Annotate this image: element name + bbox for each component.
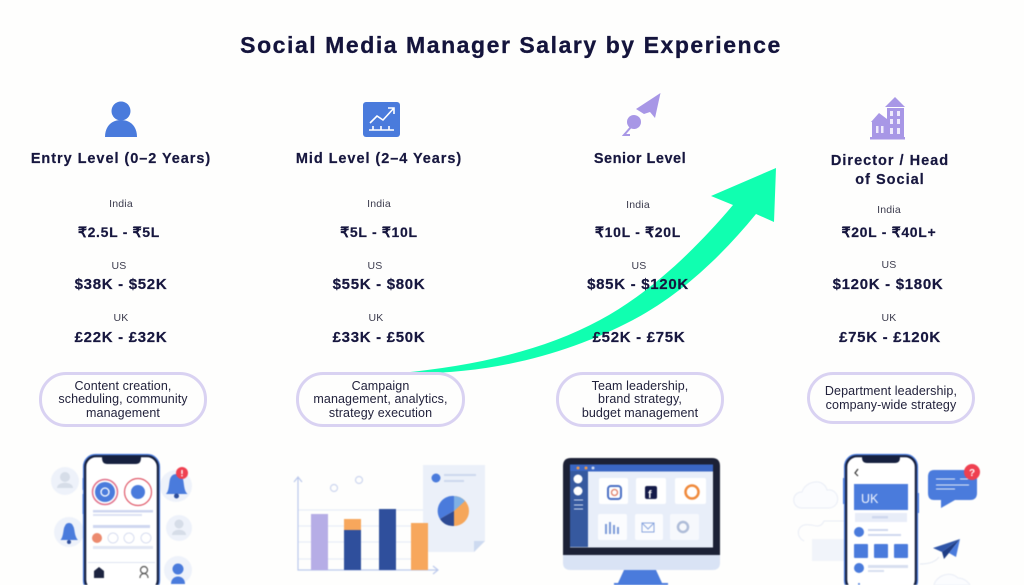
paper plane — [920, 539, 960, 564]
responsibilities — [556, 372, 724, 427]
UK range: £75K - £120K — [839, 329, 941, 346]
heading: director: Director / Head — [831, 153, 949, 169]
illustration: UK phone with chat — [793, 453, 981, 585]
India salary: India — [367, 198, 391, 210]
responsibilities — [296, 372, 465, 427]
US range: $38K - $52K — [75, 276, 167, 293]
heading: mid level: Mid Level (2–4 Years) — [296, 151, 462, 167]
responsibilities: Content creation, — [75, 379, 171, 393]
chart axes — [294, 477, 438, 574]
India range: ₹5L - ₹10L — [340, 224, 418, 240]
responsibilities: Campaign — [352, 379, 409, 393]
app tiles — [598, 478, 706, 540]
phone — [82, 454, 160, 585]
title: Social Media Manager Salary by Experience — [240, 32, 782, 58]
phone — [843, 454, 919, 585]
India range: ₹20L - ₹40L+ — [842, 224, 936, 240]
responsibilities: management — [86, 406, 160, 420]
US salary: US — [882, 259, 896, 271]
app tiles: f — [648, 489, 652, 501]
responsibilities: Team leadership, — [592, 379, 688, 393]
icon: rocket arrow — [622, 93, 660, 136]
stand — [614, 570, 668, 585]
US salary: US — [368, 260, 382, 272]
responsibilities — [807, 372, 975, 424]
monitor body — [563, 458, 720, 570]
UK salary: UK — [368, 312, 384, 324]
panel: mid level — [296, 102, 465, 427]
bars — [311, 509, 428, 570]
chat bubble: ? — [969, 468, 975, 479]
India salary: India — [626, 199, 650, 211]
panel: entry level — [31, 102, 211, 427]
bells — [54, 467, 192, 547]
background card — [812, 539, 848, 561]
responsibilities: management, analytics, — [313, 392, 448, 406]
contact avatars — [51, 467, 192, 584]
US range: $85K - $120K — [587, 276, 689, 293]
responsibilities — [39, 372, 207, 427]
responsibilities: company-wide strategy — [826, 398, 956, 412]
responsibilities: Department leadership, — [825, 384, 957, 398]
illustration: phone with notifications — [51, 453, 192, 585]
heading: director: of Social — [855, 172, 925, 188]
UK range: £22K - £32K — [75, 329, 167, 346]
US range: $55K - $80K — [333, 276, 425, 293]
responsibilities: budget management — [582, 406, 698, 420]
icon: buildings — [870, 97, 905, 140]
heading: entry level: Entry Level (0–2 Years) — [31, 151, 211, 167]
US salary: US — [632, 260, 646, 272]
US range: $120K - $180K — [833, 276, 943, 293]
illustration: desktop monitor dashboard — [562, 457, 721, 585]
UK range: £33K - £50K — [333, 329, 425, 346]
India salary: India — [877, 204, 901, 216]
UK salary: UK — [114, 312, 128, 324]
UK range: £52K - £75K — [593, 329, 685, 346]
panel: director — [807, 97, 975, 424]
chat bubble — [928, 464, 980, 508]
heading: senior level: Senior Level — [594, 151, 686, 167]
responsibilities: strategy execution — [329, 406, 432, 420]
heading: director — [831, 153, 949, 188]
India range: ₹10L - ₹20L — [595, 224, 681, 240]
icon: person — [105, 102, 137, 137]
phone: UK — [861, 492, 879, 506]
report page — [423, 465, 485, 552]
India range: ₹2.5L - ₹5L — [78, 224, 160, 240]
India salary: India — [109, 198, 133, 210]
responsibilities: brand strategy, — [598, 392, 682, 406]
illustration: bar chart and report — [293, 465, 485, 575]
decorative circles — [330, 476, 362, 492]
US salary: US — [112, 260, 126, 272]
panel: senior level — [556, 93, 724, 427]
UK salary: UK — [882, 312, 896, 324]
responsibilities: scheduling, community — [58, 392, 188, 406]
icon: chart — [363, 102, 400, 137]
clouds — [794, 482, 970, 585]
